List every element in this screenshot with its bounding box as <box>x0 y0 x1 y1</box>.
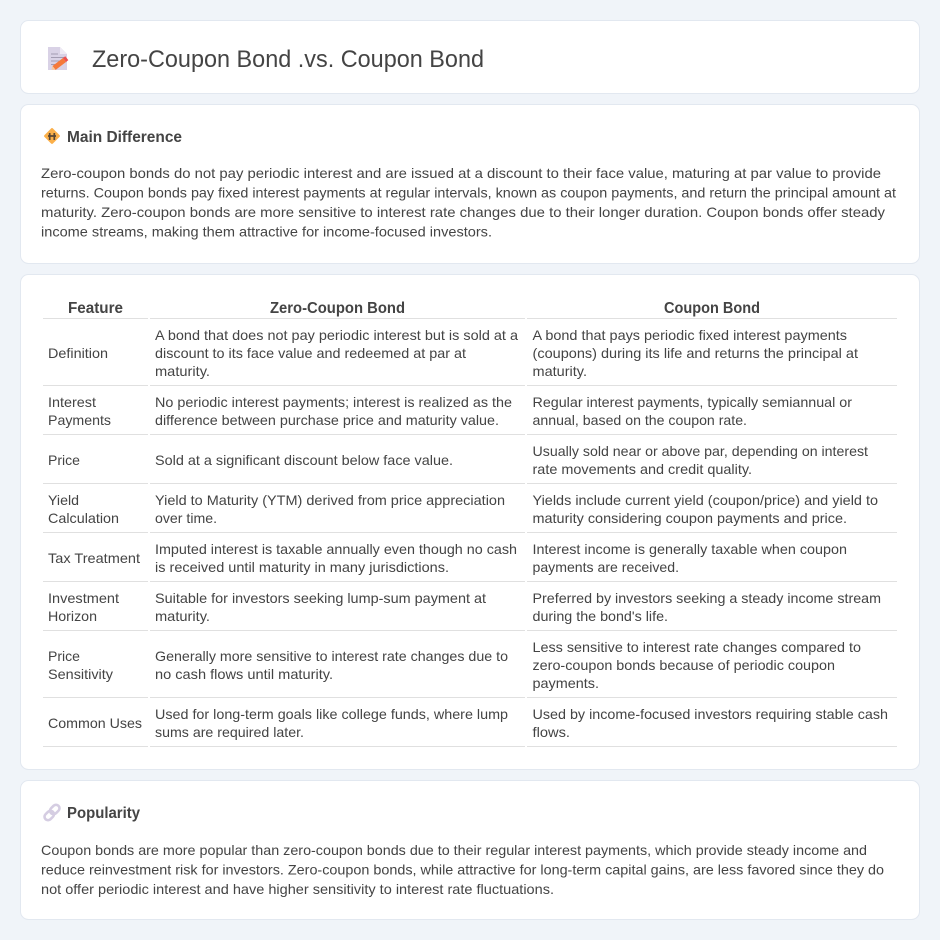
row: common uses: Used by income-focused investors requiring stable cash <box>532 706 888 722</box>
text block: main difference: returns. Coupon bonds pay fixed interest payments at regular intervals, known as coupon payments, and return the principal amount at <box>41 184 896 200</box>
row: price sensitivity: no cash flows until maturity. <box>155 666 333 682</box>
row: definition: Definition <box>48 345 108 361</box>
row: yield calculation: maturity considering coupon payments and price. <box>532 510 847 526</box>
row: price sensitivity: Less sensitive to interest rate changes compared to <box>532 639 861 655</box>
row: interest payments: Interest <box>48 394 96 410</box>
row: investment horizon: Investment <box>48 590 119 606</box>
row: definition: discount to its face value and redeemed at par at <box>155 345 466 361</box>
row: price sensitivity: Price <box>48 648 80 664</box>
row: price sensitivity: Generally more sensitive to interest rate changes due to <box>155 648 508 664</box>
table header row <box>68 300 760 317</box>
row: common uses <box>48 706 888 740</box>
row: common uses: Common Uses <box>48 715 142 731</box>
row: price sensitivity: Sensitivity <box>48 666 113 682</box>
text block: main difference: maturity. Zero-coupon bonds are more sensitive to interest rate changes due to their longer duration. Coupon bonds offer steady <box>41 204 885 220</box>
text block: main difference: Zero-coupon bonds do not pay periodic interest and are issued at a discount to their face value, maturing at par value to provide <box>41 165 881 181</box>
title: Zero-Coupon Bond .vs. Coupon Bond <box>92 46 484 73</box>
icon: warning diamond <box>44 128 60 144</box>
row: interest payments: Payments <box>48 412 111 428</box>
icon: chain link <box>43 803 61 822</box>
text block: popularity: reduce reinvestment risk for investors. Zero-coupon bonds, while attractive for long-term capital gains, are less favored since they do <box>41 862 884 878</box>
row: price: rate movements and credit quality. <box>532 461 752 477</box>
row: yield calculation: Calculation <box>48 510 119 526</box>
row: investment horizon: during the bond's life. <box>532 608 668 624</box>
row: tax treatment: Interest income is generally taxable when coupon <box>532 541 847 557</box>
row: tax treatment: is received until maturity in many jurisdictions. <box>155 559 449 575</box>
text block: popularity: not offer periodic interest and have higher sensitivity to interest rate fluctuations. <box>41 881 554 897</box>
row: interest payments: annual, based on the coupon rate. <box>532 412 747 428</box>
row: definition: maturity. <box>155 363 210 379</box>
row: yield calculation: over time. <box>155 510 217 526</box>
row: tax treatment: payments are received. <box>532 559 679 575</box>
table header row: Coupon Bond <box>664 300 760 317</box>
row: definition: A bond that pays periodic fixed interest payments <box>532 327 847 343</box>
row: yield calculation: Yield <box>48 492 79 508</box>
row: price sensitivity: zero-coupon bonds because of periodic coupon <box>532 657 835 673</box>
table header row: Feature <box>68 300 123 317</box>
heading: main difference: Main Difference <box>67 129 182 146</box>
row: investment horizon: Preferred by investors seeking a steady income stream <box>532 590 881 606</box>
row: yield calculation: Yields include current yield (coupon/price) and yield to <box>532 492 878 508</box>
row: interest payments: Regular interest payments, typically semiannual or <box>532 394 852 410</box>
row: investment horizon: Suitable for investors seeking lump-sum payment at <box>155 590 486 606</box>
row: yield calculation: Yield to Maturity (YTM) derived from price appreciation <box>155 492 505 508</box>
panel: popularity <box>20 780 920 920</box>
row: tax treatment: Imputed interest is taxable annually even though no cash <box>155 541 517 557</box>
panel: comparison table <box>20 274 920 770</box>
row: price: Price <box>48 452 80 468</box>
row: interest payments: No periodic interest payments; interest is realized as the <box>155 394 512 410</box>
row: interest payments: difference between purchase price and maturity value. <box>155 412 499 428</box>
panel: title header <box>20 20 920 94</box>
row: price sensitivity <box>48 639 861 691</box>
row: common uses: Used for long-term goals like college funds, where lump <box>155 706 508 722</box>
row: investment horizon: maturity. <box>155 608 210 624</box>
row: yield calculation <box>48 492 878 526</box>
row: definition: maturity. <box>532 363 587 379</box>
icon: document with pencil <box>48 47 67 70</box>
row: definition <box>48 327 858 379</box>
row: common uses: flows. <box>532 724 570 740</box>
text block: main difference <box>41 165 896 240</box>
row: price: Usually sold near or above par, depending on interest <box>532 443 868 459</box>
row: definition: A bond that does not pay periodic interest but is sold at a <box>155 327 518 343</box>
row: price: Sold at a significant discount below face value. <box>155 452 453 468</box>
row: investment horizon <box>48 590 881 624</box>
panel: main difference <box>20 104 920 264</box>
text block: popularity <box>41 842 884 897</box>
row: investment horizon: Horizon <box>48 608 97 624</box>
row: tax treatment <box>48 541 847 575</box>
row: tax treatment: Tax Treatment <box>48 550 140 566</box>
row: price sensitivity: payments. <box>532 675 599 691</box>
row: definition: (coupons) during its life and returns the principal at <box>532 345 858 361</box>
text block: popularity: Coupon bonds are more popular than zero-coupon bonds due to their regular interest payments, which provide steady income and <box>41 842 867 858</box>
heading: popularity: Popularity <box>67 805 140 822</box>
row: common uses: sums are required later. <box>155 724 304 740</box>
row: interest payments <box>48 394 852 428</box>
row: price <box>48 443 868 477</box>
table header row: Zero-Coupon Bond <box>270 300 405 317</box>
text block: main difference: income streams, making them attractive for income-focused investors. <box>41 224 492 240</box>
